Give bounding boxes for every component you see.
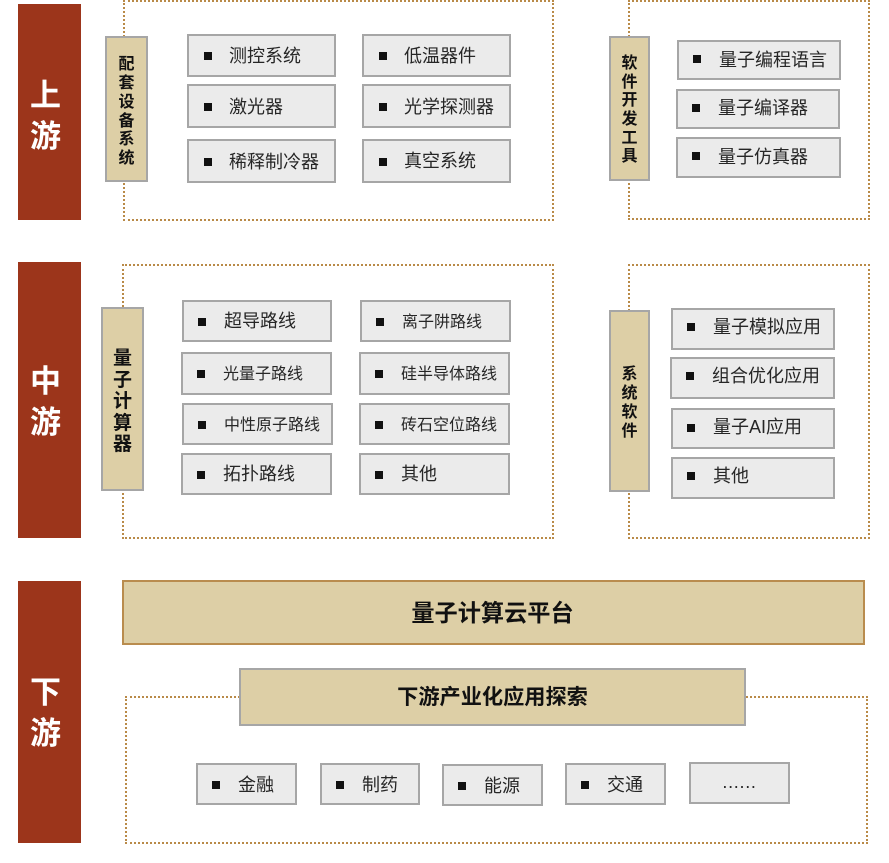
label: supporting equipment systems: 配 xyxy=(118,56,134,73)
item: superconducting route: 超导路线 xyxy=(224,310,296,330)
item: neutral atom route: 中性原子路线 xyxy=(224,416,320,434)
item: energy: 能源 xyxy=(484,776,520,796)
item: photonic route xyxy=(181,352,332,395)
stage label: downstream xyxy=(18,581,81,843)
stage label: downstream: 下 xyxy=(30,675,61,710)
heading: quantum computing cloud platform: 量子计算云平台 xyxy=(411,600,574,626)
item: other computing routes: 其他 xyxy=(401,464,437,484)
stage label: downstream: 游 xyxy=(30,716,61,751)
item: combinatorial optimization applications: 组合优化应用 xyxy=(712,366,820,386)
item: silicon semiconductor route xyxy=(359,352,510,395)
item: other applications: 其他 xyxy=(713,466,749,486)
label: quantum computer: 计 xyxy=(113,391,132,412)
label: software development tools: 件 xyxy=(621,74,638,91)
item: quantum simulator xyxy=(676,137,841,178)
label: system software: 系 xyxy=(621,366,638,383)
label: supporting equipment systems: 设 xyxy=(118,94,134,111)
item: dilution refrigerator xyxy=(187,139,336,183)
stage label: midstream: 游 xyxy=(30,405,61,440)
heading: quantum computing cloud platform xyxy=(122,580,865,645)
item: optical detector xyxy=(362,84,511,128)
label: software development tools: 开 xyxy=(621,92,638,109)
item: silicon semiconductor route: 硅半导体路线 xyxy=(401,366,497,383)
item: energy xyxy=(442,764,543,806)
item: transportation: 交通 xyxy=(607,774,643,794)
label: system software: 软 xyxy=(621,404,638,421)
item: dilution refrigerator: 稀释制冷器 xyxy=(229,152,319,172)
item: quantum programming language xyxy=(677,40,841,80)
label: quantum computer: 子 xyxy=(113,370,132,391)
item: ellipsis xyxy=(689,762,790,804)
item: quantum simulator: 量子仿真器 xyxy=(718,146,808,166)
stage label: upstream: 游 xyxy=(30,119,61,154)
item: neutral atom route xyxy=(182,403,333,445)
panel: midstream quantum computers xyxy=(122,264,554,539)
item: quantum compiler xyxy=(676,89,840,129)
item: quantum AI applications: 量子AI应用 xyxy=(713,417,802,437)
heading: downstream industrial application exploration xyxy=(239,668,746,726)
item: cryogenic devices: 低温器件 xyxy=(404,46,476,66)
item: photonic route: 光量子路线 xyxy=(223,366,303,383)
label: supporting equipment systems: 系 xyxy=(118,131,134,148)
label: software development tools: 软 xyxy=(621,55,638,72)
stage label: upstream xyxy=(18,4,81,220)
item: ion trap route xyxy=(360,300,511,342)
item: quantum AI applications xyxy=(671,408,835,449)
label: supporting equipment systems: 备 xyxy=(118,112,134,130)
label: system software: 件 xyxy=(621,423,638,440)
item: measurement and control: 测控系统 xyxy=(229,46,301,66)
item: other computing routes xyxy=(359,453,510,495)
item: vacuum system xyxy=(362,139,511,183)
label: software development tools: 工 xyxy=(621,130,638,147)
item: topological route xyxy=(181,453,332,495)
item: diamond vacancy route xyxy=(359,403,510,445)
item: measurement and control xyxy=(187,34,336,77)
item: vacuum system: 真空系统 xyxy=(404,150,476,170)
label: software development tools: 具 xyxy=(621,148,638,165)
label: supporting equipment systems: 统 xyxy=(118,150,134,167)
stage label: midstream xyxy=(18,262,81,538)
item: laser xyxy=(187,84,336,128)
label: quantum computer: 器 xyxy=(113,434,132,455)
item: ion trap route: 离子阱路线 xyxy=(402,314,482,330)
item: transportation xyxy=(565,763,666,805)
label: system software xyxy=(609,310,650,492)
item: ellipsis: ...... xyxy=(722,772,757,792)
panel: midstream system software xyxy=(628,264,870,539)
heading: downstream industrial application exploration: 下游产业化应用探索 xyxy=(397,686,588,709)
stage label: midstream: 中 xyxy=(30,364,61,399)
panel: downstream industrial applications xyxy=(125,696,868,844)
label: quantum computer: 量 xyxy=(113,348,132,369)
stage label: upstream: 上 xyxy=(30,78,61,113)
label: quantum computer: 算 xyxy=(113,413,132,434)
label: software development tools xyxy=(609,36,650,181)
label: supporting equipment systems: 套 xyxy=(118,75,134,92)
item: topological route: 拓扑路线 xyxy=(223,464,295,484)
item: optical detector: 光学探测器 xyxy=(404,96,494,116)
label: supporting equipment systems xyxy=(105,36,148,182)
item: quantum compiler: 量子编译器 xyxy=(718,98,808,118)
label: quantum computer xyxy=(101,307,144,491)
item: laser: 激光器 xyxy=(229,96,283,116)
item: quantum simulation applications xyxy=(671,308,835,350)
item: quantum simulation applications: 量子模拟应用 xyxy=(713,317,821,337)
item: finance xyxy=(196,763,297,805)
label: system software: 统 xyxy=(621,385,638,402)
item: diamond vacancy route: 砖石空位路线 xyxy=(401,416,497,434)
item: quantum programming language: 量子编程语言 xyxy=(719,50,827,70)
item: other applications xyxy=(671,457,835,499)
item: superconducting route xyxy=(182,300,332,342)
panel: upstream software tools xyxy=(628,0,870,220)
item: combinatorial optimization applications xyxy=(670,357,835,399)
label: software development tools: 发 xyxy=(621,111,638,128)
panel: upstream supporting systems xyxy=(123,0,554,221)
item: pharmaceuticals: 制药 xyxy=(362,774,398,794)
item: cryogenic devices xyxy=(362,34,511,77)
item: finance: 金融 xyxy=(238,774,274,794)
item: pharmaceuticals xyxy=(320,763,420,805)
